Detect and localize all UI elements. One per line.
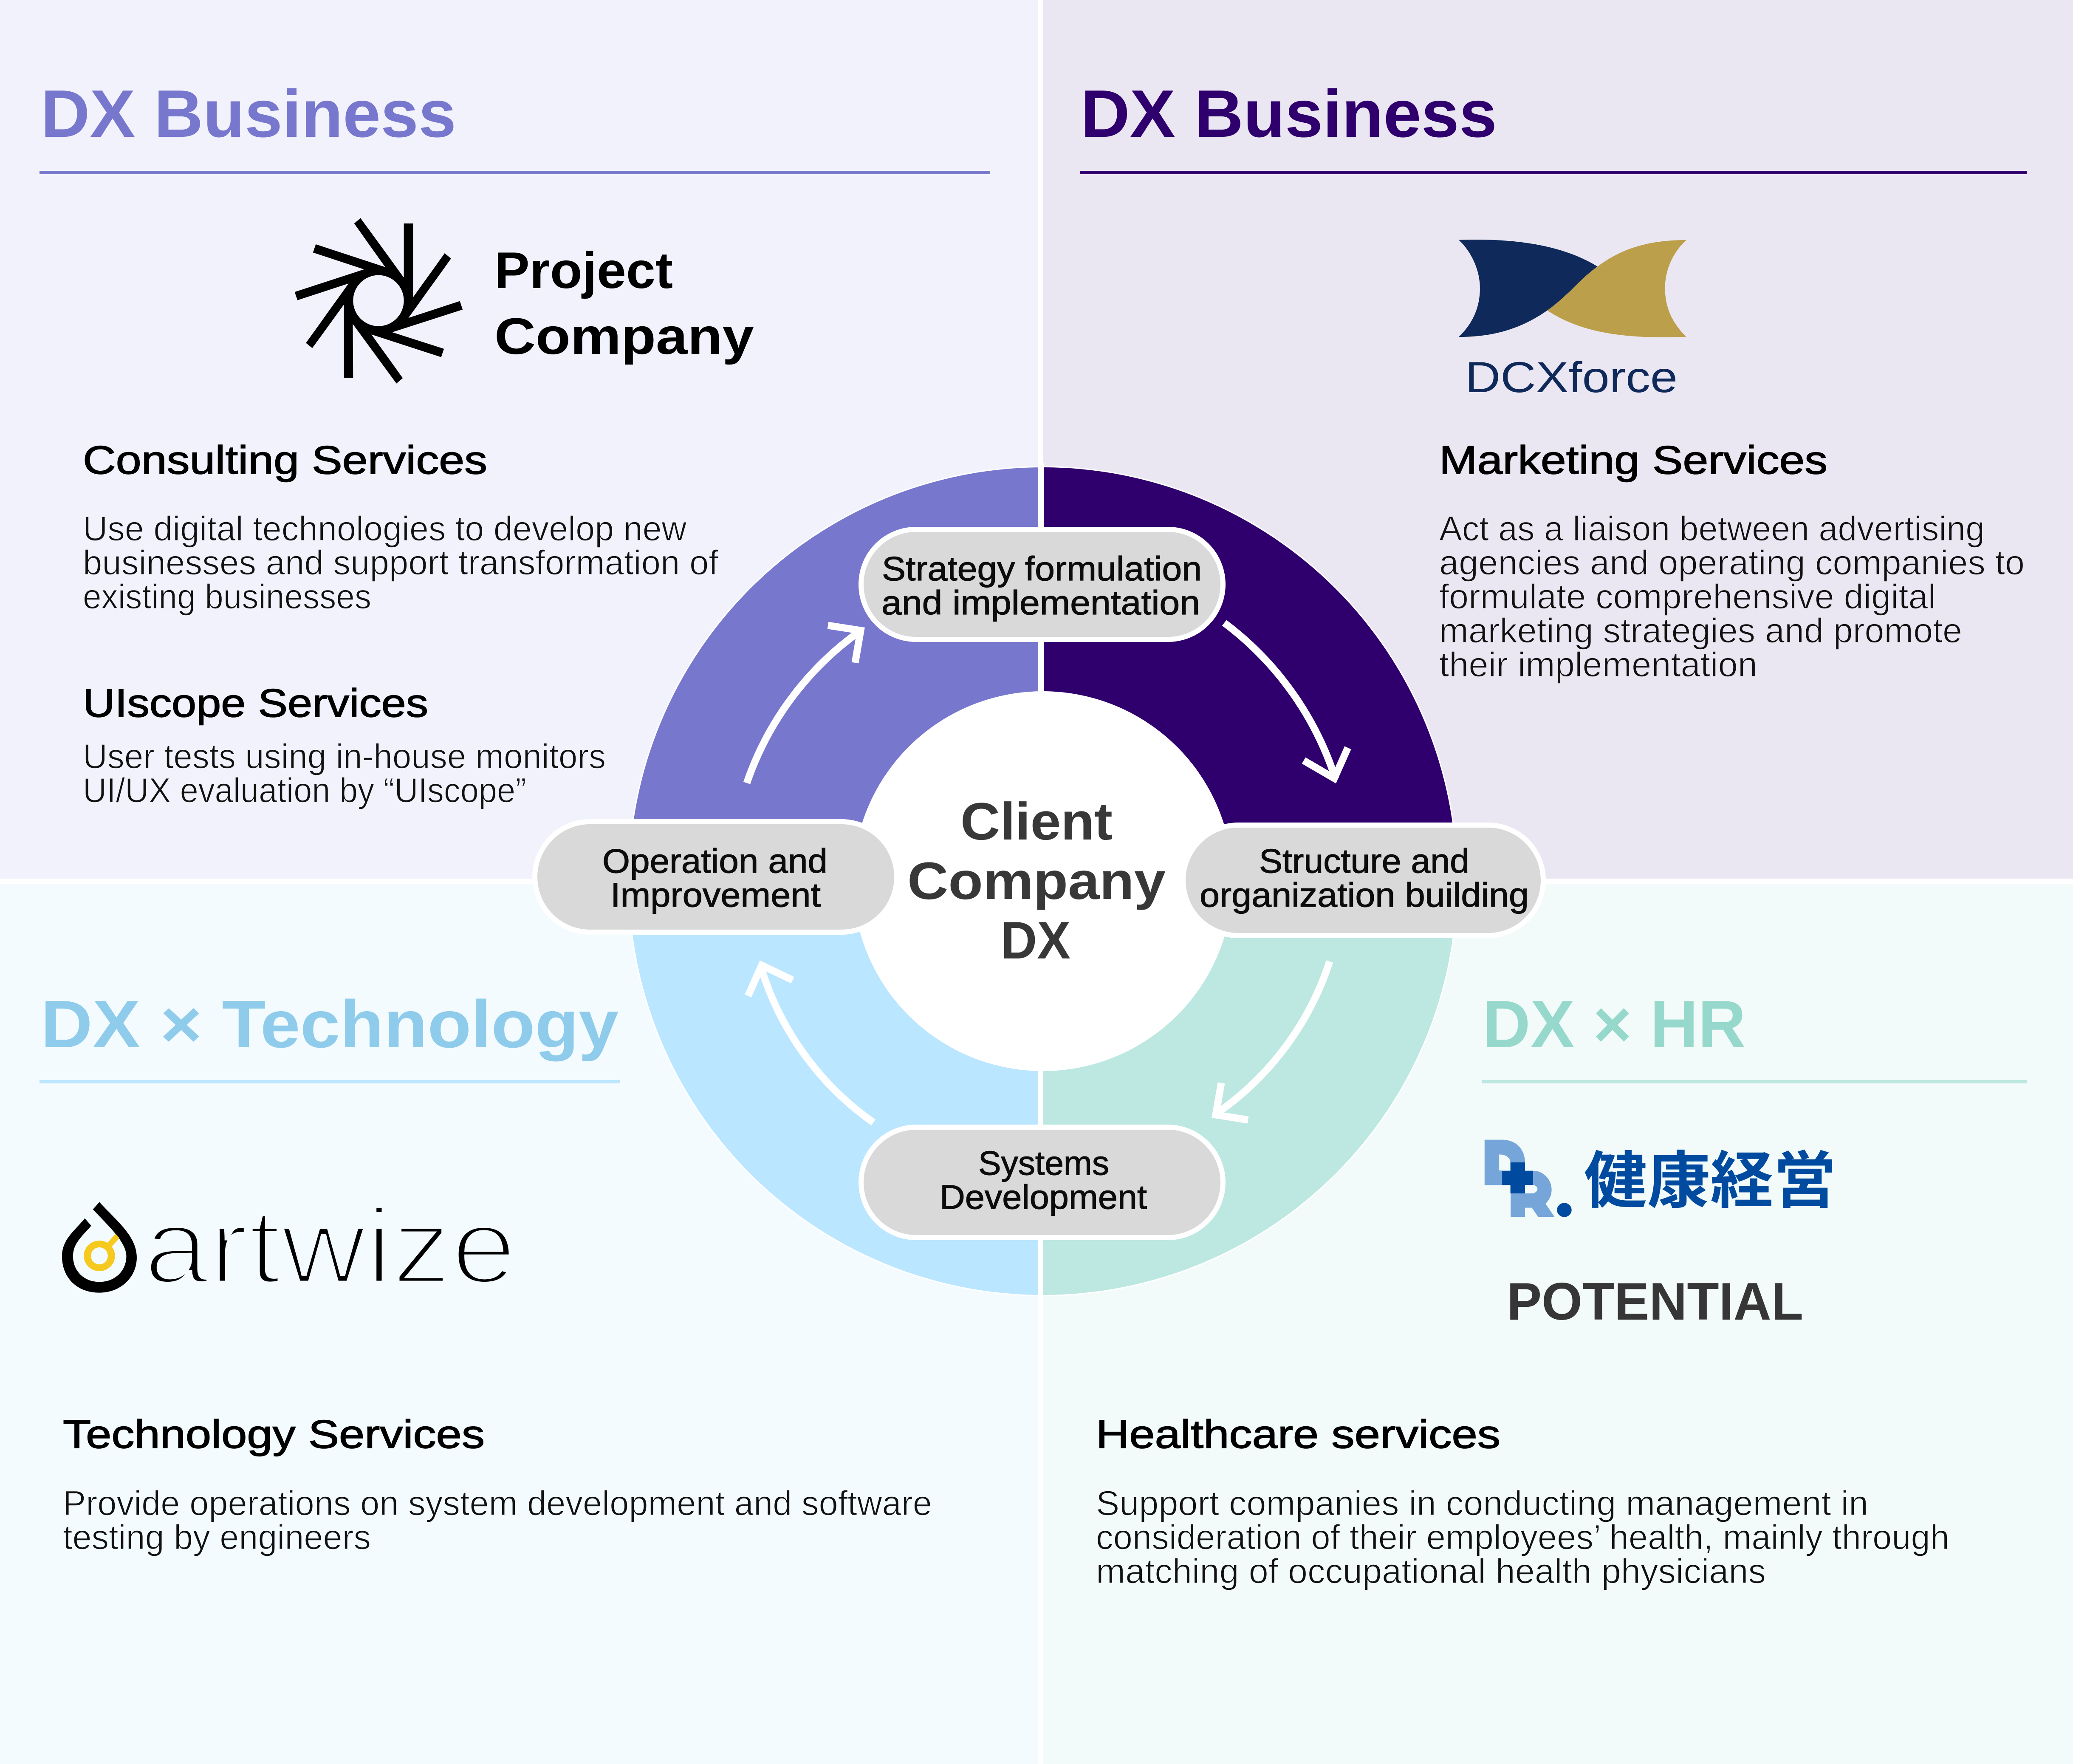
- pill: Operation and Improvement: Improvement: [610, 876, 821, 914]
- service description: marketing: marketing strategies and promote: [1439, 611, 1962, 650]
- pill: Structure and organization building: [1183, 825, 1543, 936]
- service description: healthcare: consideration of their employees’ health, mainly through: [1096, 1518, 1949, 1557]
- service description: technology: testing by engineers: [63, 1518, 371, 1557]
- heading: DX Business: DX Business: [41, 76, 456, 151]
- service heading: Technology Services: Technology Services: [63, 1412, 485, 1456]
- center label: Client Company DX: Client: [960, 792, 1113, 851]
- logo: POTENTIAL: POTENTIAL: [1507, 1272, 1803, 1331]
- pill: Operation and Improvement: [535, 822, 897, 932]
- service heading: Consulting Services: Consulting Services: [83, 438, 487, 482]
- ring segment: systems (mint): [1043, 881, 1457, 1295]
- heading: DX × Technology: DX × Technology: [41, 987, 619, 1062]
- service description: healthcare: [1096, 1484, 1949, 1591]
- service description: UIscope: UI/UX evaluation by “UIscope”: [83, 771, 526, 810]
- ring outline: [628, 466, 1458, 1296]
- service description: consulting: [83, 509, 718, 616]
- service description: consulting: businesses and support transformation of: [83, 543, 718, 582]
- panel: DX Technology: [0, 884, 1038, 1764]
- service description: marketing: agencies and operating companies to: [1439, 543, 2025, 582]
- heading: DX × HR: DX × HR: [1483, 987, 1746, 1062]
- service description: technology: [63, 1484, 932, 1557]
- logo: Project Company: Project: [494, 241, 673, 299]
- heading rule: [40, 1080, 620, 1083]
- arrow: strategy to structure: [1224, 623, 1348, 779]
- ring segment: strategy (purple): [629, 467, 1043, 881]
- service description: consulting: Use digital technologies to develop new: [83, 509, 687, 548]
- service description: UIscope: [83, 737, 606, 810]
- service description: UIscope: User tests using in-house monitors: [83, 737, 606, 776]
- service description: healthcare: matching of occupational health physicians: [1096, 1552, 1766, 1591]
- logo: Project Company: [295, 218, 754, 384]
- panel: DX Business marketing: [1043, 0, 2073, 879]
- service description: marketing: their implementation: [1439, 645, 1757, 684]
- logo: artwize: artwize: [144, 1187, 517, 1306]
- service description: marketing: formulate comprehensive digital: [1439, 577, 1936, 616]
- service heading: UIscope Services: UIscope Services: [83, 681, 428, 725]
- pill: Structure and organization building: Structure and: [1259, 842, 1469, 880]
- ring segment: structure (indigo): [1043, 467, 1457, 881]
- arrow: operation to strategy: [747, 625, 861, 783]
- logo: Dr. 健康経営: 健康経営: [1584, 1131, 1836, 1221]
- heading rule: [1482, 1080, 2027, 1083]
- heading rule: [40, 171, 990, 174]
- pill: Strategy formulation and implementation: Strategy formulation: [882, 550, 1202, 588]
- pill: Structure and organization building: organization building: [1200, 876, 1529, 914]
- center label: Client Company DX: [907, 792, 1166, 970]
- service heading: Healthcare services: Healthcare services: [1096, 1412, 1500, 1456]
- ring segment: operation (sky blue): [629, 881, 1043, 1295]
- service description: healthcare: Support companies in conducting management in: [1096, 1484, 1868, 1523]
- pill: Strategy formulation and implementation: and implementation: [881, 584, 1200, 622]
- arrow: structure to systems: [1216, 961, 1330, 1120]
- pill: Operation and Improvement: Operation and: [602, 842, 828, 880]
- pill: Systems Development: [861, 1127, 1223, 1238]
- logo: DCXforce: [1459, 240, 1686, 401]
- panel: DX Business consulting: [0, 0, 1038, 879]
- arrow: systems to operation: [748, 965, 873, 1122]
- logo: DCXforce: DCXforce: [1465, 353, 1678, 401]
- service description: technology: Provide operations on system development and software: [63, 1484, 932, 1523]
- panel: DX HR: [1043, 884, 2073, 1764]
- central cycle diagram: [535, 463, 1543, 1300]
- service description: marketing: Act as a liaison between advertising: [1439, 509, 1985, 548]
- service heading: Marketing Services: Marketing Services: [1439, 438, 1827, 482]
- center label: Client Company DX: DX: [1001, 911, 1070, 970]
- heading: DX Business: DX Business: [1081, 76, 1497, 151]
- heading rule: [1080, 171, 2027, 174]
- center label: Client Company DX: Company: [907, 852, 1166, 910]
- service description: marketing: [1439, 509, 2025, 684]
- service description: consulting: existing businesses: [83, 577, 371, 616]
- pill: Strategy formulation and implementation: [861, 529, 1223, 639]
- pill: Systems Development: Development: [940, 1178, 1147, 1216]
- logo: Project Company: Company: [494, 307, 754, 365]
- pill: Systems Development: Systems: [978, 1144, 1109, 1182]
